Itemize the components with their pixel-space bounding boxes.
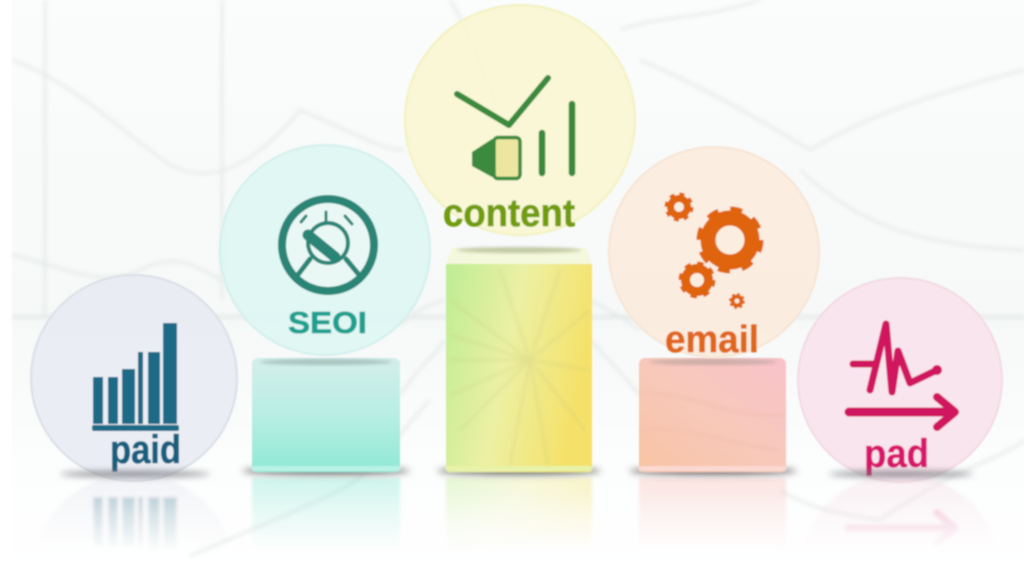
circle: pad [798, 278, 1002, 482]
circle: email [609, 147, 819, 361]
label: pad: pad [864, 432, 929, 476]
floor shadow: pad [829, 472, 973, 476]
icon: prohibited plug dial [282, 199, 374, 291]
icon: gears [666, 194, 760, 308]
icon: pulse line and arrow [849, 324, 955, 427]
circle: content [405, 5, 635, 235]
circle: SEO [220, 145, 430, 355]
box: SEO [242, 358, 410, 474]
icon: rising bar chart [92, 323, 179, 431]
upper gear [666, 194, 692, 220]
label: email: email [665, 319, 759, 361]
floor reflections [74, 476, 969, 544]
label: paid: paid [110, 428, 181, 472]
circle: paid [31, 275, 237, 481]
reflection: paid [74, 480, 193, 544]
floor shadow: paid [60, 472, 210, 476]
middle gear [681, 264, 713, 296]
large gear [700, 210, 760, 270]
box: email [629, 358, 797, 474]
label: SEOI: SEOI [288, 305, 367, 340]
reflection: pad [831, 480, 969, 542]
label: content: content [443, 192, 575, 235]
reflection: content box [444, 476, 594, 540]
icon: check mark, speaker and signal bars [457, 78, 572, 178]
reflection: SEO box [250, 476, 402, 536]
tiny gear [730, 294, 744, 308]
sunburst veins [450, 270, 590, 465]
box: content [437, 247, 601, 474]
reflection: email box [638, 477, 787, 528]
